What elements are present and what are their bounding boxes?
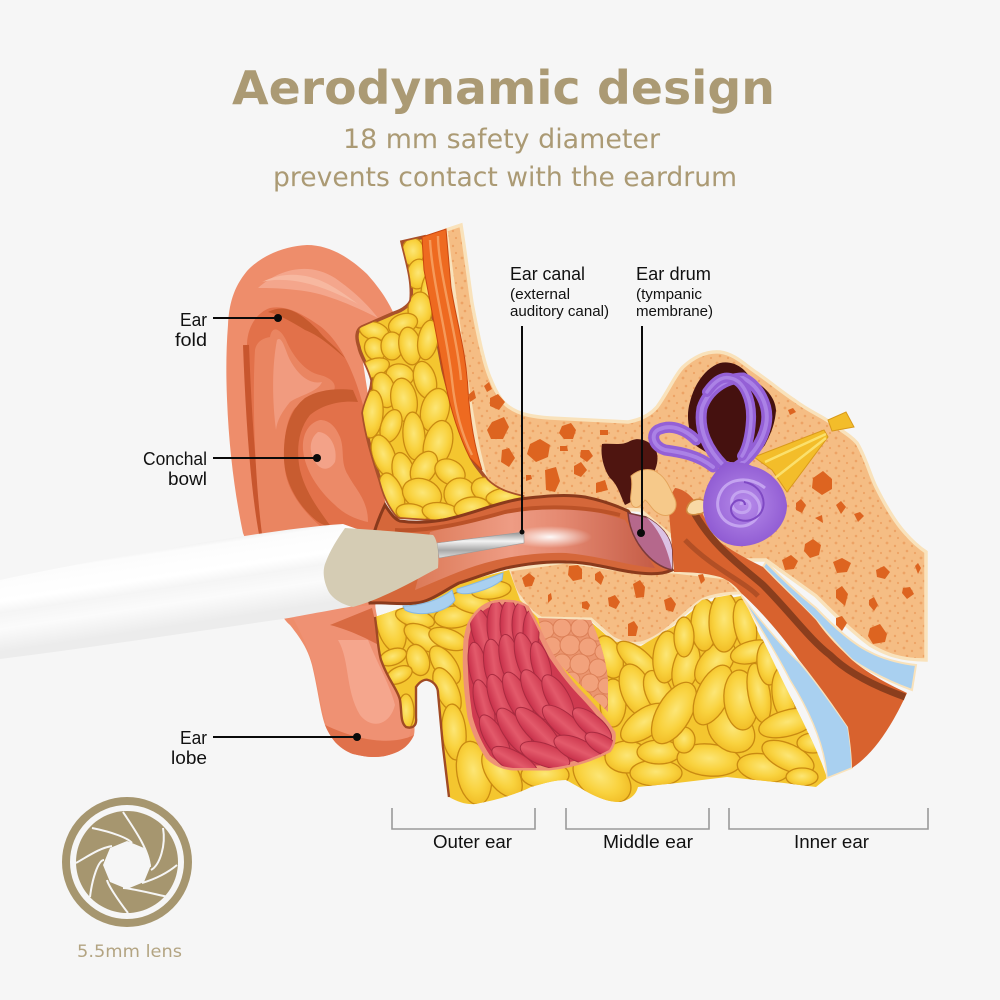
section bracket: outer ear: Outer ear [433, 832, 512, 852]
callout: ear drum: (tympanic [636, 286, 702, 303]
icon: lens aperture [66, 801, 188, 923]
callout: ear lobe [171, 728, 361, 768]
lens caption: 5.5mm lens [77, 942, 182, 962]
inner ear cavity [688, 362, 776, 463]
semicircular canals [654, 378, 767, 468]
muscle tissue [462, 600, 616, 770]
subtitle line one: 18 mm safety diameter [343, 124, 661, 155]
callout: ear drum: Ear drum [636, 264, 711, 284]
title block [232, 61, 775, 193]
callout: ear lobe: Ear [180, 728, 207, 748]
ear anatomy illustration [226, 225, 926, 814]
cochlea [703, 462, 787, 546]
muscle band [422, 229, 482, 470]
callout: ear canal: auditory canal) [510, 303, 609, 320]
subtitle line two: prevents contact with the eardrum [273, 162, 737, 193]
otoscope pen [0, 524, 524, 659]
callout: ear fold [175, 310, 282, 350]
ossicles [631, 470, 707, 516]
upper blue band [763, 562, 916, 690]
section bracket: outer ear [392, 808, 535, 852]
section bracket: middle ear: Middle ear [603, 832, 693, 852]
callout: ear canal: (external [510, 286, 570, 303]
callout: conchal bowl: Conchal [143, 449, 207, 469]
bone pores [468, 382, 921, 644]
callout: conchal bowl: bowl [168, 469, 207, 489]
section bracket: inner ear [729, 808, 928, 852]
pen probe [437, 532, 524, 558]
outer ear pinna [226, 245, 415, 757]
parotid gland [538, 618, 608, 712]
callout: ear fold: fold [175, 330, 207, 350]
soft tissue band [668, 488, 907, 768]
heading: Aerodynamic design: Aerodynamic design [232, 61, 775, 115]
callout: ear drum [636, 264, 713, 537]
upper cavity [601, 439, 657, 505]
callout: ear drum: membrane) [636, 303, 713, 320]
section bracket: inner ear: Inner ear [794, 832, 869, 852]
pen handle [0, 524, 360, 659]
auditory nerve [754, 412, 854, 492]
ear canal [368, 496, 672, 604]
ear drum membrane [628, 513, 672, 570]
pen beige tip [324, 528, 438, 607]
lower blue band [741, 595, 852, 778]
lower temporal bone [509, 562, 741, 643]
callout: ear fold: Ear [180, 310, 207, 330]
blue cartilage patches [403, 573, 503, 614]
callout: ear canal [510, 264, 609, 534]
section bracket: middle ear [566, 808, 709, 852]
fat tissue, lower [370, 570, 829, 814]
callout: conchal bowl [143, 449, 321, 489]
callout: ear canal: Ear canal [510, 264, 585, 284]
temporal bone, upper [446, 225, 926, 660]
callout: ear lobe: lobe [171, 748, 207, 768]
fat tissue, upper [356, 237, 527, 526]
